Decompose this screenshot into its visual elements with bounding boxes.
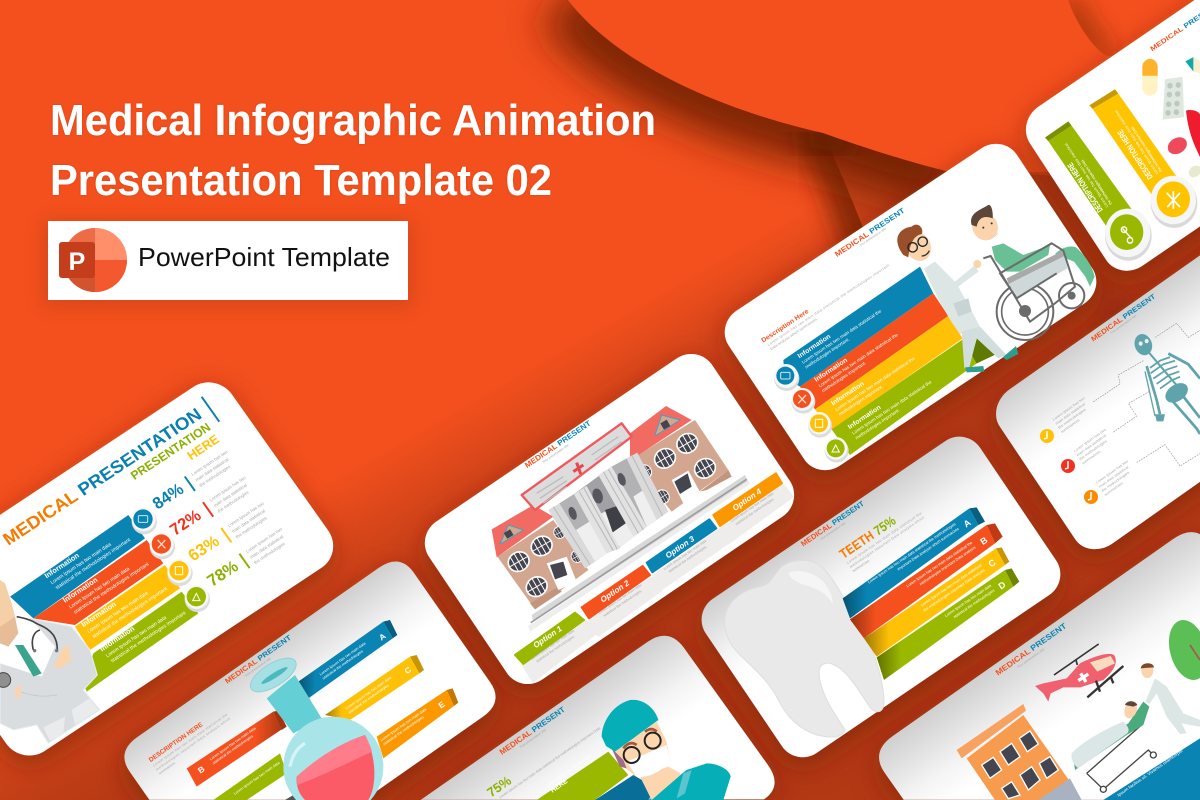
bar text: yellow: Lorem Ipsum has two main data statistical — [1114, 109, 1159, 175]
band text: Lorem Ipsum has two main data — [68, 566, 131, 610]
card: pills — [1016, 0, 1200, 281]
card text: Lorem Ipsum has two main data statistical the — [801, 308, 883, 365]
card text: the methodologies — [1101, 471, 1130, 493]
card: surgeon — [421, 627, 783, 800]
card text — [0, 397, 302, 674]
card text: Lorem Ipsum dolor accumsan, a facilisis — [1111, 742, 1181, 793]
card text: main data statistical — [1098, 465, 1129, 489]
band text: Lorem Ipsum has two main data — [86, 590, 150, 635]
card text: Lorem Ipsum has two main data statistical the — [818, 332, 899, 388]
card text — [742, 206, 996, 454]
card text: methodologies important. — [838, 384, 884, 417]
card text: Lorem Ipsum has two main data statistical — [920, 562, 983, 607]
statistics: 78% — [203, 556, 242, 590]
info bands and icons — [10, 507, 210, 692]
card: hospital — [415, 344, 804, 694]
heading: main title — [50, 96, 656, 205]
card text — [438, 355, 778, 665]
card text — [1027, 292, 1200, 497]
card: wheelchair — [715, 134, 1106, 480]
card text: Option 4 — [731, 487, 763, 513]
card text: Lorem Ipsum has two main data statistical the — [152, 713, 228, 768]
card text — [470, 694, 617, 800]
card text: methodologies important Data analysis which — [155, 717, 231, 772]
card text: statistical the methodologies — [348, 683, 390, 714]
card text: main data statistical — [249, 534, 284, 560]
band text — [43, 521, 188, 667]
band text: statistical the methodologies important — [73, 561, 151, 616]
card text: Lorem Ipsum has two main data statistical the methodologies important Data — [499, 726, 602, 799]
card: doctor statistics — [0, 372, 344, 766]
card text: MEDICAL PRESENT — [223, 633, 293, 686]
statistics — [148, 479, 242, 591]
icon: PowerPoint logo: P — [69, 248, 85, 276]
illustration: hospital building — [492, 406, 750, 632]
card text: Information — [830, 381, 866, 407]
card text: Lorem Ipsum has two — [245, 526, 284, 554]
card: skeleton — [986, 185, 1200, 560]
card text: statistical the methodologies. — [735, 497, 775, 526]
card text: D — [997, 579, 1008, 591]
illustration: tooth — [725, 560, 884, 737]
card text: Your presentation title — [1016, 647, 1045, 669]
slide heading: PRESENTATION — [128, 420, 213, 483]
stacked bands — [843, 507, 1019, 680]
card text: B — [978, 535, 990, 547]
card text: Information — [847, 404, 882, 431]
card text: A — [377, 631, 388, 643]
card text: Lorem Ipsum has two main data statistical the methodologies — [867, 521, 957, 584]
band text: Information — [43, 551, 81, 580]
card text: Lorem Ipsum has two main data statistical the — [846, 511, 922, 565]
bar text: yellow: the methodologies important Data — [1130, 125, 1163, 173]
card text: main data statistical — [1076, 434, 1107, 457]
card text: the methodologies — [1058, 408, 1087, 430]
card: tooth — [692, 427, 1070, 767]
card text: Option 3 — [664, 534, 697, 560]
band text: statistical the methodologies important — [91, 586, 169, 640]
pills illustration and bars — [1045, 57, 1200, 261]
badge: PowerPoint template — [44, 221, 412, 306]
card text: methodologies important. — [804, 337, 850, 370]
band text: Lorem Ipsum has two main data — [50, 542, 113, 586]
card text: Lorem Ipsum has two main data — [345, 675, 393, 711]
card: flask — [116, 553, 504, 800]
slide heading: MEDICAL PRESENTATION — [0, 404, 205, 549]
card text: statistical the methodologies. — [535, 634, 576, 663]
card text: MEDICAL PRESENT — [994, 622, 1068, 677]
card text: methodologies important Data analysis — [918, 545, 976, 586]
card text: Lorem Ipsum has two main data — [380, 707, 428, 742]
card text: Lorem Ipsum has two main data — [531, 629, 575, 661]
card text: methodologies important. — [821, 360, 867, 393]
card text: Your presentation title — [1110, 314, 1138, 335]
heading: main title: Medical Infographic Animation — [50, 96, 656, 145]
card text — [994, 608, 1185, 800]
card text: Lorem Ipsum has two main data statistical the methodologies important — [767, 263, 890, 347]
check icons — [1040, 429, 1098, 504]
card text: Data analysis which summarizes. — [770, 317, 819, 351]
card text: the methodologies — [253, 541, 287, 565]
card: helicopter — [870, 523, 1200, 800]
card text: DESCRIPTION HERE — [148, 721, 205, 764]
band text: statistical the methodologies important — [110, 610, 188, 664]
illustration: hospital, helicopter, stretcher, nurse, tree — [957, 616, 1200, 800]
card text: summarizes. — [1104, 481, 1124, 497]
icon: PowerPoint logo — [59, 228, 127, 292]
option boxes — [515, 473, 792, 681]
card text: Lorem Ipsum has two main data statistical the — [834, 356, 916, 412]
card text: Lorem Ipsum has two main data — [233, 760, 281, 796]
card text: Your presentation title — [858, 227, 887, 247]
card text: Option 1 — [532, 624, 564, 650]
illustration: doctor — [0, 580, 100, 743]
band text: Information — [79, 600, 118, 629]
card text: main data statistical — [194, 457, 230, 482]
card text: Lorem Ipsum has two main data — [598, 583, 642, 615]
bar text: green: the methodologies important Data — [1080, 158, 1113, 206]
card text: important Data analysis which summarizes — [896, 526, 960, 572]
card text: Lorem Ipsum has two main data — [319, 641, 367, 676]
card text — [135, 583, 447, 800]
card text: 75% — [484, 773, 514, 800]
card text: the methodologies — [217, 489, 250, 514]
card text: the methodologies — [235, 515, 268, 540]
card text: HERE — [550, 778, 570, 795]
statistics: 63% — [184, 531, 223, 565]
card text: MEDICAL PRESENT — [799, 499, 866, 548]
card text: MEDICAL PRESENT — [1090, 292, 1157, 343]
card text: Lorem Ipsum has two main data — [663, 539, 707, 571]
bar text: green: Lorem Ipsum has two main data statistical — [1064, 142, 1109, 208]
card text: Lorem Ipsum has two — [190, 449, 229, 477]
statistics: 72% — [166, 505, 205, 539]
badge: PowerPoint template: PowerPoint Template — [138, 242, 390, 272]
card text: the methodologies important Data analysis — [922, 567, 986, 613]
card text: the methodologies — [1079, 439, 1108, 461]
card text: Lorem Ipsum has two — [1095, 459, 1129, 485]
card text: methodologies important. — [854, 408, 901, 440]
bar text: green: DESCRIPTION HERE — [1066, 161, 1105, 214]
card text: statistical the methodologies — [952, 588, 995, 619]
card text: main data statistical — [213, 483, 248, 508]
card text: statistical the methodologies. — [603, 589, 643, 618]
card text: C — [402, 664, 413, 676]
card text: MEDICAL PRESENT — [523, 419, 593, 470]
card text: statistical the methodologies — [383, 715, 425, 746]
card text: Information — [797, 333, 832, 360]
band text: statistical the methodologies important — [54, 537, 132, 591]
bands and illustration: surgeon — [537, 700, 731, 800]
card text: E — [436, 699, 447, 710]
bands and icons — [774, 267, 997, 463]
card text: Lorem Ipsum has two — [209, 475, 247, 503]
card text: statistical the methodologies — [212, 734, 254, 765]
card text: Your presentation title — [819, 521, 847, 541]
card text: Lorem Ipsum has two main data statistical the — [905, 540, 973, 588]
card text: MEDICAL PRESENT — [833, 206, 907, 259]
card text: summarizes. — [1060, 418, 1081, 434]
card text: statistical the methodologies. — [668, 545, 708, 574]
card text: Lorem Ipsum has two main data statistical the — [851, 379, 933, 436]
card text: summarizes. — [852, 558, 871, 573]
band text: Lorem Ipsum has two main data — [105, 615, 168, 659]
skeleton and connector lines — [1093, 323, 1200, 466]
card text: Your presentation title — [542, 443, 570, 464]
card text: Your presentation title — [244, 656, 272, 678]
bar text: yellow: DESCRIPTION HERE — [1116, 128, 1155, 181]
card text: C — [987, 557, 998, 569]
card text: MEDICAL PRESENT — [498, 705, 567, 757]
card text: Description Here — [760, 308, 810, 344]
card text — [799, 453, 1016, 670]
card text: Your presentation title — [519, 728, 547, 749]
card text: Lorem Ipsum has two — [1052, 396, 1086, 422]
card text: A — [962, 517, 973, 529]
illustration: doctor and wheelchair patient — [897, 205, 1095, 372]
card text: main data statistical — [231, 508, 266, 534]
card text: methodologies important Data analysis which — [849, 516, 925, 569]
card text: main data statistical — [1055, 402, 1086, 426]
option bars — [187, 620, 458, 800]
card text: Lorem Ipsum has two main data — [546, 753, 593, 787]
slide heading: HERE — [185, 432, 222, 463]
card text: Lorem Ipsum has two main data — [209, 726, 257, 761]
band text: Information — [98, 624, 136, 653]
card text: statistical the methodologies — [322, 649, 364, 680]
card text: the methodologies — [198, 464, 232, 488]
illustration: flask — [245, 652, 383, 800]
card text: B — [196, 764, 207, 775]
card text: Lorem Ipsum has two — [227, 501, 265, 528]
card text: Lorem Ipsum has two — [1073, 428, 1107, 453]
card text: Option 2 — [599, 578, 631, 604]
card text: Information — [813, 357, 849, 384]
card text: Lorem Ipsum has two main data — [944, 582, 993, 618]
band text: Information — [61, 575, 99, 605]
heading: main title: Presentation Template 02 — [50, 156, 552, 205]
slide heading — [0, 397, 231, 573]
card text: summarizes. — [1081, 449, 1102, 465]
card text: Ipsum facilisis sit. Vivamus ullamcorper — [1116, 748, 1184, 798]
statistics: 84% — [149, 479, 187, 513]
card text: TEETH 75% — [837, 513, 899, 562]
card text: summarizes. — [158, 761, 177, 776]
background: curved sheets — [568, 0, 1200, 345]
card text: Lorem Ipsum has two main data — [730, 491, 774, 523]
